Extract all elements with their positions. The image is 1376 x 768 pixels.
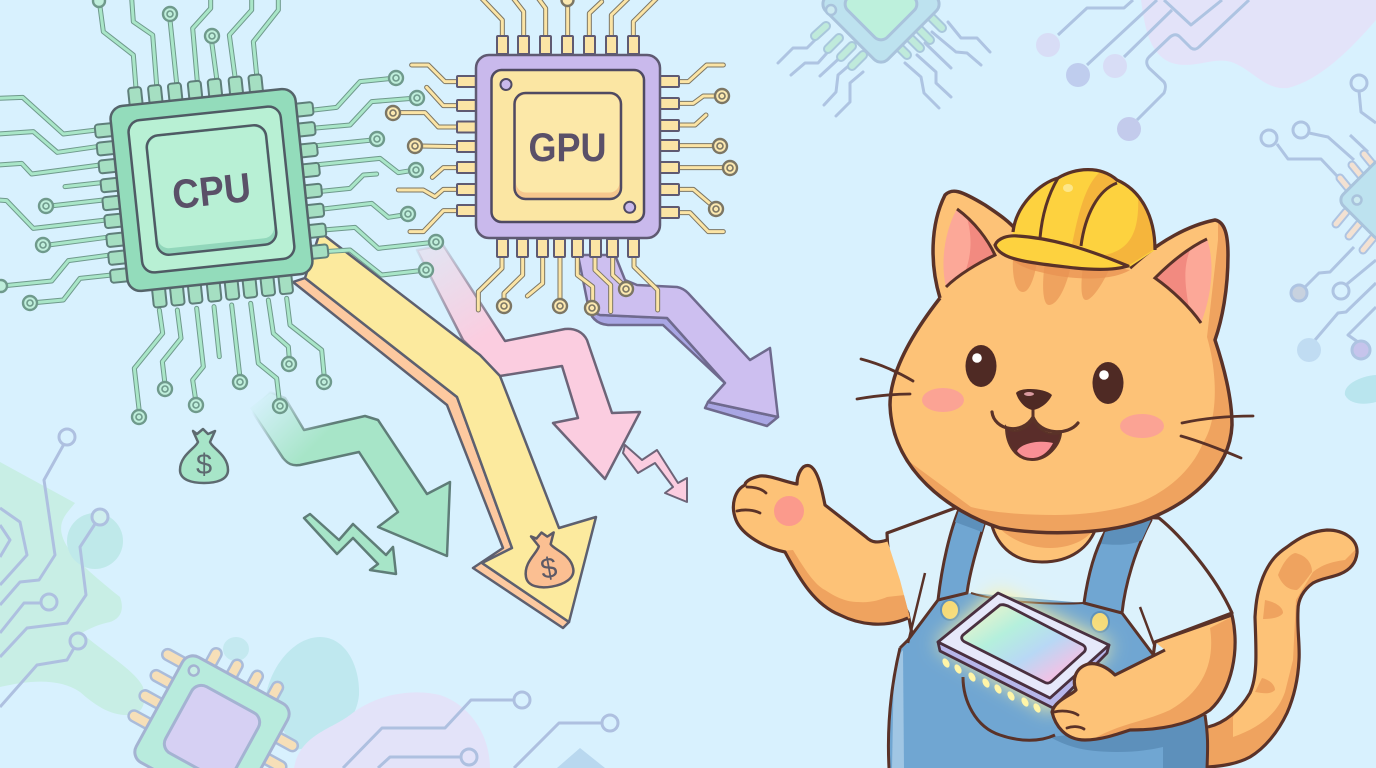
cat holding arm: [1052, 610, 1245, 745]
arrow: large yellow falling arrow: [293, 232, 596, 628]
cat cheeks: [922, 388, 1164, 438]
head stripes: [1013, 258, 1110, 305]
overalls straps: [938, 507, 986, 600]
background chip: top centre: [778, 0, 990, 116]
icon: orange money bag: [519, 528, 576, 591]
hat brim: [995, 236, 1128, 269]
background chip: right edge with circuit: [1261, 75, 1376, 362]
background chip: bottom left: [111, 626, 321, 768]
cat mascot: [733, 170, 1365, 768]
overalls buttons: [941, 600, 959, 620]
cat mouth: [992, 404, 1078, 460]
CPU traces: [0, 0, 431, 412]
overalls pocket: [963, 677, 1055, 740]
CPU package: [91, 69, 332, 312]
CPU trace terminals: [0, 0, 443, 424]
GPU traces: [398, 0, 724, 312]
CPU chip with traces: [0, 0, 443, 424]
cat neck: [990, 515, 1097, 562]
background circuit lines: left: [0, 429, 108, 707]
icon: orange money bag: $: [538, 552, 560, 586]
icon: green money bag: $: [196, 449, 212, 481]
background circuit lines: top right: [1036, 0, 1249, 141]
arrow: large green falling arrow: [250, 392, 450, 556]
cat waving arm: [733, 466, 915, 630]
shirt creases: [908, 573, 1155, 647]
GPU trace terminals: [386, 0, 737, 315]
label: CPU: CPU: [170, 165, 253, 218]
arrow: small pink falling arrow: [623, 445, 687, 502]
arrow: pink falling arrow: [417, 245, 640, 479]
glowing chip held by cat: [936, 590, 1112, 714]
GPU chip with traces: [386, 0, 737, 315]
cat eyes: [966, 345, 1124, 404]
GPU package: [457, 36, 679, 257]
arrow: small green falling arrow: [304, 514, 396, 574]
cat hard hat: [995, 170, 1155, 269]
cat tail: [1208, 525, 1365, 767]
arrow: purple falling arrow: [578, 255, 778, 426]
right inner ear: [1155, 239, 1212, 323]
cat head: [857, 170, 1253, 533]
cat whiskers: [857, 359, 1253, 458]
label: GPU: GPU: [528, 126, 607, 170]
icon: green money bag: [180, 429, 228, 483]
background circuit lines: bottom: [343, 692, 618, 768]
cat nose: [1016, 389, 1052, 410]
cat overalls: [888, 507, 1215, 768]
cat shirt: [887, 507, 1232, 680]
left inner ear: [943, 209, 995, 287]
